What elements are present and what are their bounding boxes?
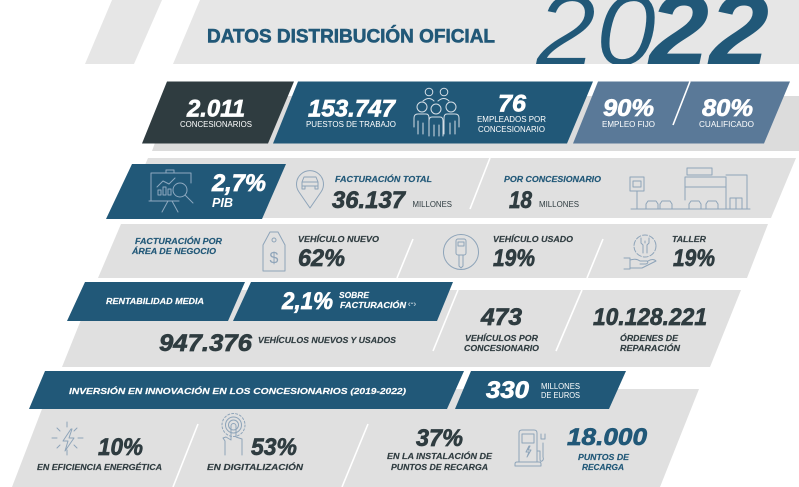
icon: charging station — [515, 430, 545, 466]
icon: car key — [444, 234, 478, 270]
panel: rentabilidad sobre facturación: (*) — [408, 301, 417, 306]
facturación total text — [332, 175, 452, 214]
icon: dealership — [630, 168, 750, 209]
vehículos por concesionario — [464, 304, 540, 353]
por concesionario text — [504, 175, 602, 214]
panel: PIB — [106, 164, 286, 219]
icon: people — [414, 88, 459, 136]
panel: concesionarios: CONCESIONARIOS — [180, 120, 252, 129]
icon: touch — [222, 414, 245, 455]
panel: inversión en innovación — [29, 371, 464, 409]
digitalización: EN DIGITALIZACIÓN — [207, 463, 303, 472]
vehículo usado — [493, 235, 574, 272]
órdenes de reparación: 10.128.221 — [593, 304, 707, 331]
órdenes de reparación: ÓRDENES DE — [620, 334, 679, 343]
taller: 19% — [673, 245, 715, 272]
órdenes de reparación — [593, 304, 707, 353]
header band — [85, 0, 799, 64]
panel: puestos de trabajo: 153.747 — [308, 96, 397, 122]
panel: concesionarios: 2.011 — [186, 96, 245, 122]
panel: empleo fijo y cualificado: CUALIFICADO — [699, 120, 754, 129]
vehículo nuevo: VEHÍCULO NUEVO — [298, 235, 380, 244]
panel: rentabilidad media: RENTABILIDAD MEDIA — [106, 297, 204, 306]
órdenes de reparación: REPARACIÓN — [620, 344, 680, 353]
panel: rentabilidad sobre facturación: FACTURACIÓN — [340, 301, 406, 310]
panel: concesionarios — [142, 82, 294, 144]
panel: empleo fijo y cualificado — [573, 82, 790, 144]
panel: 330 millones de euros — [455, 371, 626, 409]
panel: vehículos — [62, 290, 741, 367]
year 2022 — [536, 0, 768, 64]
icon: gear wrench in hand — [624, 235, 656, 269]
puntos de recarga instalación — [387, 425, 493, 472]
panel: 330 millones de euros: MILLONES — [541, 382, 580, 391]
puntos de recarga instalación: 37% — [416, 425, 463, 452]
panel: rentabilidad sobre facturación — [233, 282, 453, 321]
vehículos nuevos y usados: VEHÍCULOS NUEVOS Y USADOS — [258, 336, 397, 345]
heading: ÁREA DE NEGOCIO — [131, 247, 217, 256]
panel: empleo fijo y cualificado: 90% — [603, 95, 654, 122]
panel: employment backdrop — [152, 96, 799, 151]
panel: 330 millones de euros: 330 — [486, 377, 530, 404]
por concesionario text: POR CONCESIONARIO — [504, 175, 602, 184]
vehículo usado: 19% — [493, 245, 535, 272]
facturación total text: FACTURACIÓN TOTAL — [335, 175, 432, 184]
vehículos nuevos y usados — [159, 330, 397, 357]
panel: puestos de trabajo: EMPLEADOS POR — [477, 115, 546, 124]
panel: innovación — [12, 389, 699, 487]
icon: energy bolt — [52, 422, 83, 455]
title: DATOS DISTRIBUCIÓN OFICIAL — [207, 26, 495, 48]
18.000 puntos de recarga — [567, 424, 648, 472]
por concesionario text: 18 — [509, 187, 533, 214]
panel: inversión en innovación: INVERSIÓN EN INNOVACIÓN EN LOS CONCESIONARIOS (2019-2022) — [69, 387, 406, 396]
heading: FACTURACIÓN POR — [135, 237, 222, 246]
panel: rentabilidad sobre facturación: 2,1% — [281, 288, 333, 315]
taller: TALLER — [672, 235, 706, 244]
panel: rentabilidad sobre facturación: SOBRE — [339, 291, 370, 300]
panel: facturación — [122, 158, 796, 218]
18.000 puntos de recarga: RECARGA — [582, 463, 624, 472]
icon: presentation chart — [149, 170, 193, 212]
panel: empleo fijo y cualificado: 80% — [702, 95, 753, 122]
por concesionario text: MILLONES — [539, 200, 579, 209]
vehículos por concesionario: VEHÍCULOS POR — [465, 334, 538, 343]
vehículos nuevos y usados: 947.376 — [159, 330, 253, 357]
eficiencia energética — [37, 434, 162, 472]
icon: car pin — [297, 171, 324, 208]
18.000 puntos de recarga: 18.000 — [567, 424, 648, 451]
vehículo usado: VEHÍCULO USADO — [493, 235, 574, 244]
panel: puestos de trabajo: 76 — [498, 90, 527, 118]
vehículos por concesionario: 473 — [480, 304, 523, 331]
heading — [131, 237, 222, 256]
panel: puestos de trabajo — [273, 82, 593, 144]
panel: puestos de trabajo: CONCESIONARIO — [478, 125, 545, 134]
panel: PIB: PIB — [212, 195, 233, 210]
icon: price tag: $ — [270, 250, 279, 267]
vehículos por concesionario: CONCESIONARIO — [464, 344, 540, 353]
eficiencia energética: EN EFICIENCIA ENERGÉTICA — [37, 463, 162, 472]
facturación total text: MILLONES — [412, 200, 452, 209]
digitalización: 53% — [251, 434, 297, 461]
panel: rentabilidad media — [67, 282, 245, 321]
panel: 330 millones de euros: DE EUROS — [541, 391, 580, 400]
panel: empleo fijo y cualificado: EMPLEO FIJO — [602, 120, 655, 129]
puntos de recarga instalación: PUNTOS DE RECARGA — [391, 463, 488, 472]
taller — [672, 235, 715, 272]
puntos de recarga instalación: EN LA INSTALACIÓN DE — [387, 452, 493, 461]
vehículo nuevo: 62% — [298, 245, 345, 272]
18.000 puntos de recarga: PUNTOS DE — [578, 453, 630, 462]
eficiencia energética: 10% — [98, 434, 143, 461]
vehículo nuevo — [298, 235, 380, 272]
digitalización — [207, 434, 303, 472]
facturación total text: 36.137 — [332, 187, 407, 214]
panel: facturación por área de negocio — [98, 224, 768, 278]
panel: PIB: 2,7% — [211, 170, 266, 197]
panel: puestos de trabajo: PUESTOS DE TRABAJO — [306, 120, 396, 129]
icon: price tag — [263, 232, 285, 271]
